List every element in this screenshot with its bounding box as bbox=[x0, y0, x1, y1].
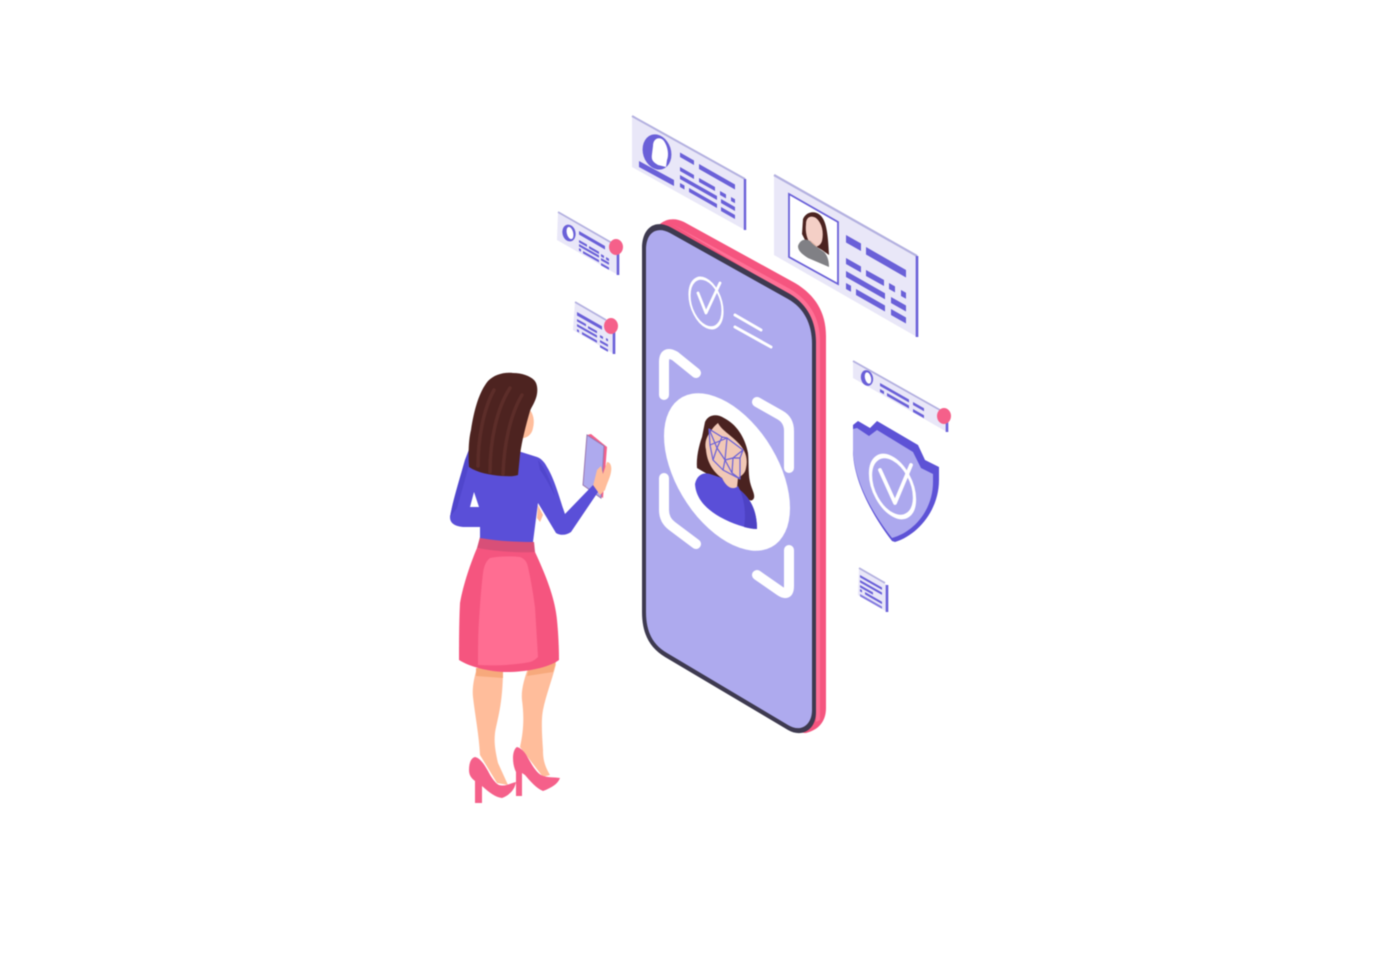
text lines bbox=[577, 312, 608, 352]
text lines: large card bbox=[846, 235, 906, 324]
icon: profile avatar bbox=[638, 131, 676, 186]
text lines on screen bbox=[735, 315, 771, 347]
phone screen bbox=[646, 230, 812, 728]
panel: top profile card bbox=[632, 116, 745, 230]
panel: small card with pin, lower left bbox=[573, 302, 618, 354]
icon: notification pin bbox=[937, 408, 951, 424]
legs bbox=[473, 662, 556, 785]
small phone in hand bbox=[583, 434, 607, 498]
portrait being scanned bbox=[695, 415, 757, 529]
text lines: top card bbox=[680, 152, 735, 219]
icon: small avatar bbox=[859, 369, 875, 387]
icon: check badge on screen bbox=[690, 272, 722, 334]
figure: woman holding phone bbox=[450, 373, 611, 803]
text lines bbox=[880, 383, 924, 418]
gap between arm and torso bbox=[470, 492, 479, 507]
hair bbox=[469, 373, 537, 476]
neck and face bbox=[518, 402, 534, 438]
scan frame brackets bbox=[664, 354, 789, 593]
panel: right card with pin bbox=[853, 361, 951, 432]
shoe: right bbox=[513, 747, 560, 796]
phone: large smartphone bbox=[642, 219, 826, 733]
icon: notification pin bbox=[609, 239, 623, 255]
shoe: left bbox=[469, 757, 516, 803]
panel: large ID card with photo bbox=[774, 175, 917, 337]
phone side bbox=[660, 219, 826, 733]
panel: small card with pin, upper left bbox=[557, 212, 623, 275]
panel: small document bbox=[858, 568, 887, 612]
scan circle bbox=[664, 366, 790, 578]
photo frame with woman portrait bbox=[789, 194, 838, 284]
skirt bbox=[459, 537, 559, 672]
shading on blouse bbox=[538, 460, 555, 496]
phone body bbox=[642, 224, 816, 733]
icon: small avatar bbox=[561, 223, 577, 243]
hand bbox=[593, 462, 611, 495]
skin between arm and torso bbox=[537, 505, 543, 522]
text lines bbox=[579, 231, 609, 270]
icon: notification pin bbox=[604, 318, 618, 334]
blouse and arms bbox=[450, 447, 598, 542]
face mesh bbox=[709, 429, 743, 479]
icon: security shield with check bbox=[853, 421, 939, 542]
